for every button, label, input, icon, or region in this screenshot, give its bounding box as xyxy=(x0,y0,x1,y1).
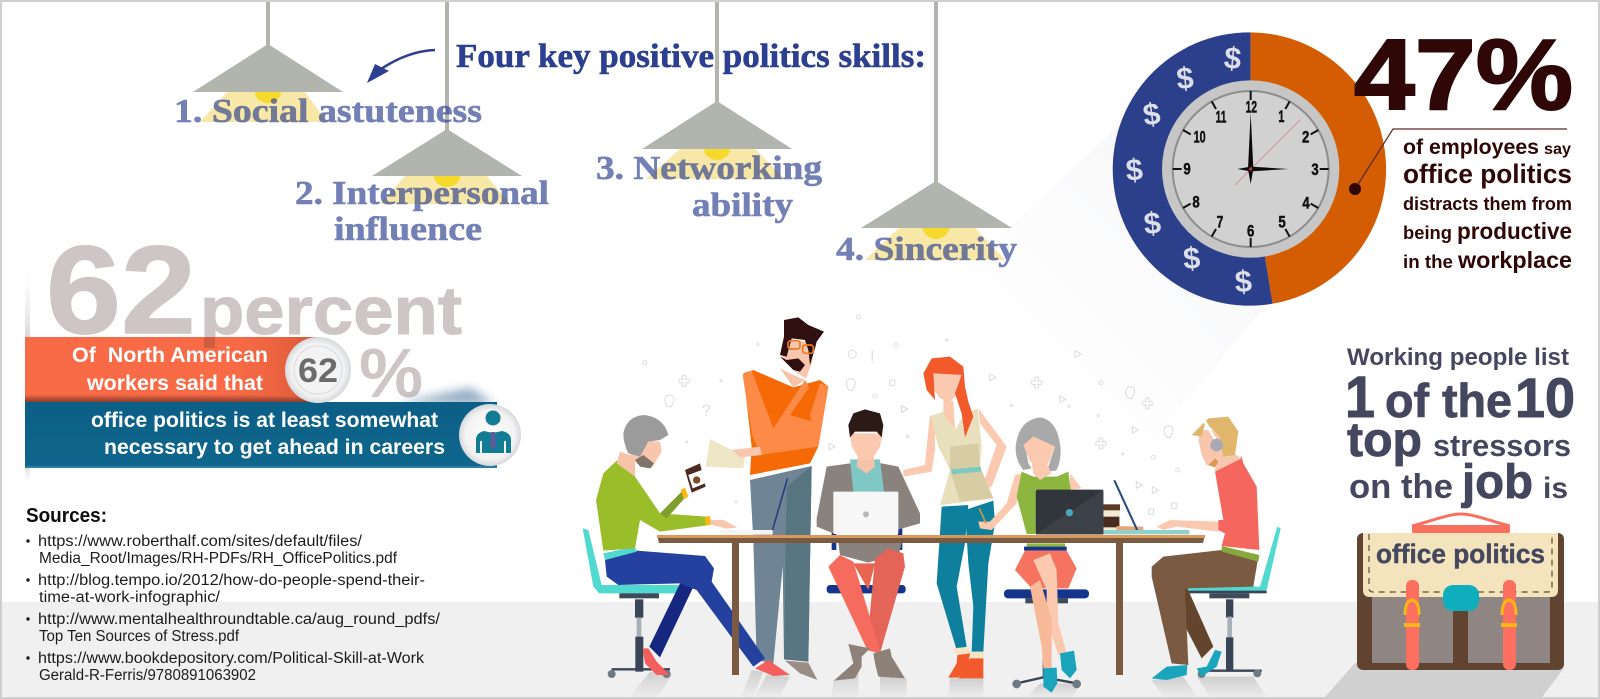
background doodles xyxy=(901,338,1180,514)
source list: Gerald-R-Ferris/9780891063902 xyxy=(39,667,256,684)
illustration: left half of the team xyxy=(583,315,920,697)
blue bar shadow xyxy=(395,388,495,404)
dollar signs: $ xyxy=(1125,153,1144,188)
lamp 4 xyxy=(861,0,1012,260)
text: top stressors: stressors xyxy=(1433,428,1571,463)
text: top stressors: of the xyxy=(1385,374,1512,427)
dollar signs: $ xyxy=(1223,41,1243,76)
text: employees statement xyxy=(1403,136,1572,273)
coral bar xyxy=(25,337,320,402)
teal chair xyxy=(583,528,679,678)
text: employees statement: distracts them from xyxy=(1403,194,1572,214)
skill 3: 3. Networking xyxy=(596,150,822,187)
illustration: right half of the team xyxy=(901,338,1281,697)
dollar signs: $ xyxy=(1141,97,1163,133)
background doodles: ! xyxy=(870,348,875,367)
text: top stressors: 1 xyxy=(1345,365,1375,430)
clock numerals: 1 xyxy=(1278,107,1284,126)
source list: http://www.mentalhealthroundtable.ca/aug_round_pdfs/ xyxy=(38,611,441,628)
lamp 1 xyxy=(193,0,343,122)
text: top stressors: is xyxy=(1543,472,1568,505)
skill 2: influence xyxy=(334,211,482,248)
clock long shadow xyxy=(930,120,1270,470)
big 62: 62 xyxy=(46,221,196,360)
teal chair xyxy=(1185,527,1281,678)
source list: Top Ten Sources of Stress.pdf xyxy=(39,628,240,645)
source list: https://www.bookdepository.com/Political-Skill-at-Work xyxy=(38,650,424,667)
clock numerals: 3 xyxy=(1311,160,1319,179)
clock numerals: 6 xyxy=(1247,222,1254,241)
briefcase label: office politics xyxy=(1376,539,1545,569)
donut: blue segment xyxy=(1113,32,1273,306)
lamp 3 xyxy=(642,0,792,179)
clock numerals: 10 xyxy=(1194,128,1206,147)
callout leader line xyxy=(1349,129,1567,195)
skill 4: 4. Sincerity xyxy=(836,231,1017,268)
panel: 62 percent statistic xyxy=(25,221,521,486)
icon: businessperson badge xyxy=(459,404,521,466)
47 percent figure: 47% xyxy=(1354,19,1573,131)
blue bar text: necessary to get ahead in careers xyxy=(104,436,445,459)
sheet of paper xyxy=(706,439,745,468)
dollar signs xyxy=(1125,41,1253,299)
source list: Media_Root/Images/RH-PDFs/RH_OfficePolitics.pdf xyxy=(39,550,398,567)
dollar signs: $ xyxy=(1175,61,1195,96)
clock donut chart 47 percent xyxy=(1113,32,1386,306)
text: employees statement: being xyxy=(1403,222,1452,243)
text: top stressors xyxy=(1345,344,1575,509)
dollar signs: $ xyxy=(1234,265,1253,299)
coral bar text: Of North American xyxy=(72,344,268,367)
person: standing man in orange xyxy=(706,317,828,680)
blue bar xyxy=(25,402,497,468)
clock numerals: 8 xyxy=(1192,193,1200,212)
clock numerals: 11 xyxy=(1216,108,1226,127)
dollar signs: $ xyxy=(1142,206,1162,241)
person: seated woman with grey hair xyxy=(978,417,1189,693)
lamp 2 xyxy=(372,0,522,204)
clock numerals: 4 xyxy=(1302,193,1310,212)
sources xyxy=(26,505,441,684)
skill 2 xyxy=(295,175,549,248)
text: top stressors: on the xyxy=(1349,468,1453,506)
text: employees statement: in the xyxy=(1403,251,1453,272)
person: man in green sweater xyxy=(583,415,790,678)
black laptop xyxy=(1036,490,1103,534)
floor shadows xyxy=(948,677,1267,697)
text: top stressors: top xyxy=(1347,414,1422,467)
badge: 62 xyxy=(285,337,351,403)
source list xyxy=(26,533,441,684)
text: employees statement: say xyxy=(1544,141,1571,158)
source list: https://www.roberthalf.com/sites/default/files/ xyxy=(38,533,363,550)
text: employees statement: workplace xyxy=(1457,247,1572,273)
sources heading: Sources: xyxy=(26,505,107,527)
skill 3 xyxy=(596,150,822,224)
blue bar text xyxy=(91,409,445,459)
person: man with headset xyxy=(1152,417,1281,680)
blue bar text: office politics is at least somewhat xyxy=(91,409,438,432)
clock numerals xyxy=(1183,98,1319,241)
laptop screen and base xyxy=(1113,480,1138,530)
coffee cup xyxy=(1103,504,1120,534)
donut: orange segment xyxy=(1251,32,1386,304)
background doodles xyxy=(643,315,909,503)
text: top stressors: 10 xyxy=(1515,366,1575,429)
floor band xyxy=(2,602,1598,697)
text: employees statement: of employees xyxy=(1403,136,1539,159)
laptop xyxy=(720,478,788,530)
dollar signs: $ xyxy=(1182,241,1201,276)
text: employees statement: office politics xyxy=(1403,159,1572,189)
text: employees statement: productive xyxy=(1457,218,1572,244)
source list: time-at-work-infographic/ xyxy=(39,589,221,606)
coffee cup xyxy=(685,463,706,493)
text: top stressors: Working people list xyxy=(1347,344,1569,371)
person: standing woman with red hair xyxy=(903,357,1007,678)
clock numerals: 9 xyxy=(1183,160,1191,179)
clock face xyxy=(1162,80,1339,258)
coral bar text: workers said that xyxy=(86,372,263,395)
coral bar text xyxy=(72,344,268,395)
arrow to skill list xyxy=(367,50,435,83)
source list: http://blog.tempo.io/2012/how-do-people-spend-their- xyxy=(38,572,425,589)
background doodles: ? xyxy=(702,401,711,420)
badge: 62: 62 xyxy=(298,352,338,390)
clock numerals: 2 xyxy=(1302,128,1309,147)
percent word: percent xyxy=(200,273,462,349)
floor shadows xyxy=(630,670,907,697)
clock numerals: 5 xyxy=(1278,213,1286,232)
clock hands xyxy=(1235,113,1300,185)
clock numerals: 7 xyxy=(1217,213,1223,232)
title: four key skills: Four key positive politics skills: xyxy=(456,38,926,75)
icon: briefcase xyxy=(1325,514,1564,697)
conference table xyxy=(657,535,1205,675)
person: seated man in grey vest xyxy=(817,409,920,681)
text: top stressors: job xyxy=(1461,456,1533,509)
notebook xyxy=(1117,526,1143,531)
percent sign: % xyxy=(359,334,423,412)
skill 2: 2. Interpersonal xyxy=(295,175,549,212)
skill 3: ability xyxy=(692,187,793,224)
skill 1: 1. Social astuteness xyxy=(174,93,482,130)
clock numerals: 12 xyxy=(1246,98,1257,117)
